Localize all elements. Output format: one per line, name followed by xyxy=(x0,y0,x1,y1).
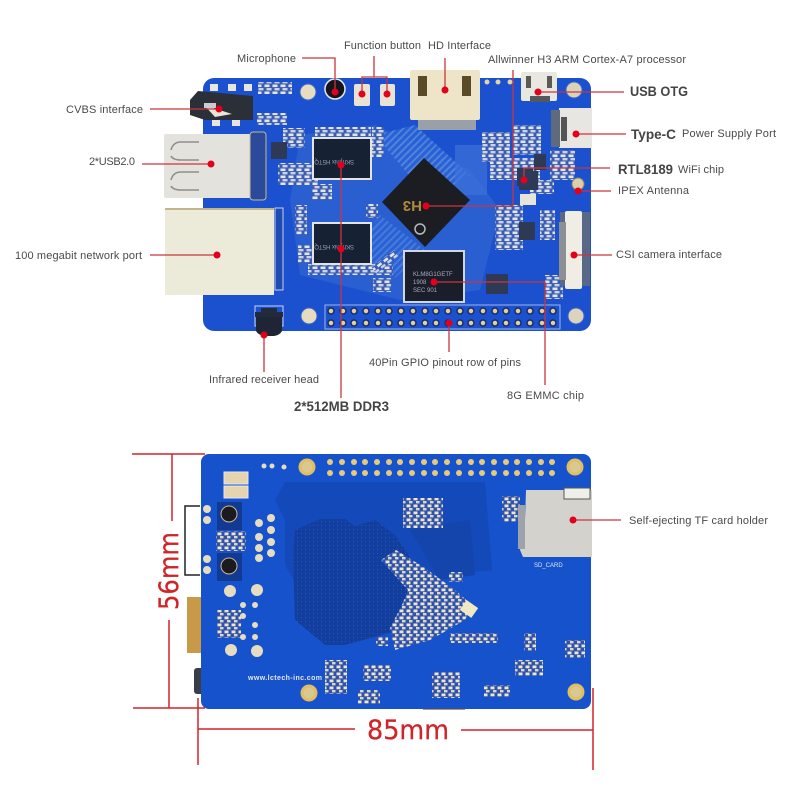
dark ground region right xyxy=(410,520,475,580)
dark ground region xyxy=(293,519,425,645)
WiFi chip xyxy=(517,168,533,186)
label: CVBS interface xyxy=(66,104,222,116)
dimension: 56mm: 56mm xyxy=(154,532,185,610)
website silk label: www.lctech-inc.com xyxy=(247,675,322,682)
label: 2*512MB DDR3 xyxy=(294,162,389,414)
label: Function button xyxy=(344,40,421,98)
DDR3 chip 1 xyxy=(312,137,372,180)
label: Function button: Function button xyxy=(344,40,421,52)
DDR3 chip 1: SKhynix H5TQ xyxy=(314,158,354,164)
dimension: 85mm xyxy=(198,688,593,770)
label: 8G EMMC chip: 8G EMMC chip xyxy=(507,390,584,402)
diagonal traces lower xyxy=(345,215,425,278)
H3 processor: H3 xyxy=(403,197,422,214)
inner trace outline xyxy=(275,482,492,590)
component clusters xyxy=(257,82,575,299)
trace area around the memory xyxy=(290,125,500,300)
board substrate xyxy=(203,78,591,331)
right trace block xyxy=(455,145,487,195)
TF silk label: SD_CARD xyxy=(534,563,563,569)
label: CSI camera interface xyxy=(570,249,722,261)
infrared receiver xyxy=(255,306,283,336)
label: 2*USB2.0: 2*USB2.0 xyxy=(89,156,135,168)
TF edge xyxy=(423,706,465,710)
label: CVBS interface: CVBS interface xyxy=(66,104,143,116)
label: 8G EMMC chip xyxy=(430,278,584,402)
label: Type-C Power Supply Port: Type-C xyxy=(631,126,676,142)
label: RTL8189 WiFi chip: RTL8189 xyxy=(618,161,673,177)
audio jack xyxy=(190,84,253,126)
label: 100 megabit network port: 100 megabit network port xyxy=(15,250,142,262)
small dark components xyxy=(271,142,546,294)
label: IPEX Antenna xyxy=(574,185,690,197)
label: TF card holder xyxy=(570,515,768,527)
component cluster centre xyxy=(216,496,585,704)
DDR3 chip 2 xyxy=(312,222,372,265)
label: CSI camera interface: CSI camera interface xyxy=(616,249,722,261)
label: HD Interface: HD Interface xyxy=(428,40,491,52)
small white connector xyxy=(520,194,536,205)
capacitors xyxy=(224,472,248,498)
network port xyxy=(165,208,283,295)
EMMC chip: KLM8G1GETF xyxy=(413,272,453,278)
mounting hole bottom right xyxy=(568,308,584,324)
label: 40Pin GPIO: 40Pin GPIO pinout row of pins xyxy=(369,357,522,369)
micro USB port xyxy=(521,72,557,102)
label: Infrared receiver head xyxy=(209,332,319,386)
label: RTL8189 WiFi chip xyxy=(520,161,724,184)
label: 2*USB2.0 xyxy=(89,156,214,168)
microphone xyxy=(325,79,345,99)
DDR3 chip 2: SKhynix H5TQ xyxy=(314,243,354,249)
HDMI port xyxy=(410,70,480,130)
label: Microphone: Microphone xyxy=(237,53,296,65)
EMMC chip: 1908 xyxy=(413,280,427,286)
GPIO holes xyxy=(327,459,555,476)
dimension: 56mm xyxy=(132,454,205,708)
mounting holes xyxy=(300,460,583,700)
mounting hole top left xyxy=(300,84,316,100)
label: Infrared receiver head: Infrared receiver head xyxy=(209,374,319,386)
label: HD Interface xyxy=(428,40,491,94)
board substrate xyxy=(201,454,591,709)
label: 2*512MB DDR3: 2*512MB DDR3 xyxy=(294,398,389,414)
dimension: 85mm: 85mm xyxy=(367,715,449,746)
top board xyxy=(164,70,592,336)
label: USB OTG: USB OTG xyxy=(630,83,688,99)
label: 100 megabit network port xyxy=(15,250,220,262)
mounting hole top right xyxy=(566,82,582,98)
TF card holder xyxy=(518,488,592,557)
Function buttons xyxy=(354,84,395,106)
diagonal traces xyxy=(375,125,470,200)
USB 2.0 port xyxy=(164,132,266,200)
H3 processor xyxy=(382,158,470,247)
left through holes xyxy=(203,464,286,657)
USB Type-C port xyxy=(551,108,592,148)
EMMC chip xyxy=(403,250,465,303)
label: 40Pin GPIO xyxy=(369,320,522,369)
label: RTL8189 WiFi chip: WiFi chip xyxy=(678,164,724,176)
CSI edge outline xyxy=(185,506,200,575)
pin header by HDMI xyxy=(484,80,512,84)
label: IPEX Antenna: IPEX Antenna xyxy=(618,185,690,197)
label: Microphone xyxy=(237,53,338,96)
switches xyxy=(217,502,242,581)
IPEX antenna connector xyxy=(572,178,584,190)
mounting hole bottom left xyxy=(301,308,317,324)
EMMC chip: SEC 901 xyxy=(413,288,438,294)
HDMI edge seen from below xyxy=(187,597,201,653)
label: Type-C Power Supply Port xyxy=(572,126,776,142)
CSI connector xyxy=(559,211,590,289)
label: Allwinner H3 processor xyxy=(422,54,686,210)
bottom board xyxy=(185,454,592,710)
label: TF card holder: Self-ejecting TF card holder xyxy=(629,515,768,527)
label: USB OTG xyxy=(534,83,688,99)
label: Type-C Power Supply Port: Power Supply Port xyxy=(682,128,776,140)
label: Allwinner H3 processor: Allwinner H3 ARM Cortex-A7 processor xyxy=(488,54,686,66)
audio jack edge xyxy=(194,668,204,694)
GPIO header xyxy=(325,305,560,329)
